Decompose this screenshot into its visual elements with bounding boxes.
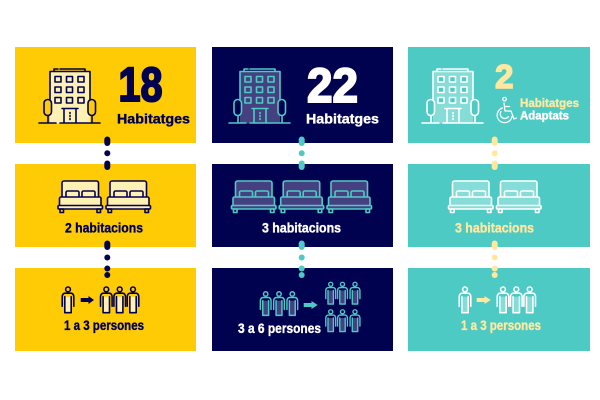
icon: building bbox=[422, 69, 483, 124]
icon: person bbox=[62, 287, 74, 313]
icon: arrow bbox=[304, 301, 318, 309]
icon: bed bbox=[58, 181, 102, 212]
column: navy bbox=[212, 47, 393, 351]
label: Habitatges: Habitatges bbox=[117, 110, 190, 126]
label: Adaptats: Adaptats bbox=[520, 110, 569, 122]
panel: 18 habitatges bbox=[15, 47, 196, 143]
icon: wheelchair bbox=[497, 97, 516, 123]
icon: bed bbox=[279, 181, 324, 212]
label: 1 a 3 persones: 1 a 3 persones bbox=[64, 317, 144, 333]
number: 22: 22 bbox=[307, 60, 358, 113]
icon: person bbox=[459, 287, 471, 313]
panel: 1 a 3 persones bbox=[408, 268, 590, 351]
icon: bed bbox=[496, 181, 541, 212]
icon: bed bbox=[106, 181, 150, 212]
label: 3 a 6 persones: 3 a 6 persones bbox=[238, 320, 321, 336]
panel: 1 a 3 persones bbox=[15, 268, 196, 351]
icon: building bbox=[229, 69, 290, 124]
label: Habitatges: Habitatges bbox=[520, 98, 579, 110]
icon: three people bbox=[497, 287, 536, 313]
icon: six people bbox=[326, 282, 360, 332]
icon: bed bbox=[448, 181, 493, 212]
icon: arrow bbox=[81, 296, 94, 304]
panel: 22 habitatges bbox=[212, 47, 393, 143]
label: 3 habitacions: 3 habitacions bbox=[455, 220, 534, 236]
panel: 3 habitacions bbox=[212, 164, 393, 247]
label: Habitatges: Habitatges bbox=[306, 110, 379, 126]
connector dots bbox=[492, 136, 498, 278]
label: 2 habitacions: 2 habitacions bbox=[65, 220, 143, 236]
icon: building bbox=[39, 69, 100, 124]
column: teal bbox=[408, 47, 590, 351]
label: 1 a 3 persones: 1 a 3 persones bbox=[461, 317, 541, 333]
icon: three people bbox=[260, 292, 298, 315]
panel: 3 habitacions bbox=[408, 164, 590, 247]
icon: three people bbox=[100, 287, 139, 313]
panel: 2 habitatges adaptats bbox=[408, 47, 590, 143]
connector dots bbox=[104, 136, 110, 278]
icon: bed bbox=[232, 181, 276, 212]
panel: 3 a 6 persones bbox=[212, 268, 393, 351]
connector dots bbox=[299, 136, 305, 278]
number: 2: 2 bbox=[495, 58, 514, 95]
panel: 2 habitacions bbox=[15, 164, 196, 247]
number: 18: 18 bbox=[118, 59, 162, 112]
label: 3 habitacions: 3 habitacions bbox=[262, 220, 341, 236]
column: yellow bbox=[15, 47, 196, 351]
icon: arrow bbox=[477, 296, 491, 304]
icon: bed bbox=[327, 181, 372, 212]
